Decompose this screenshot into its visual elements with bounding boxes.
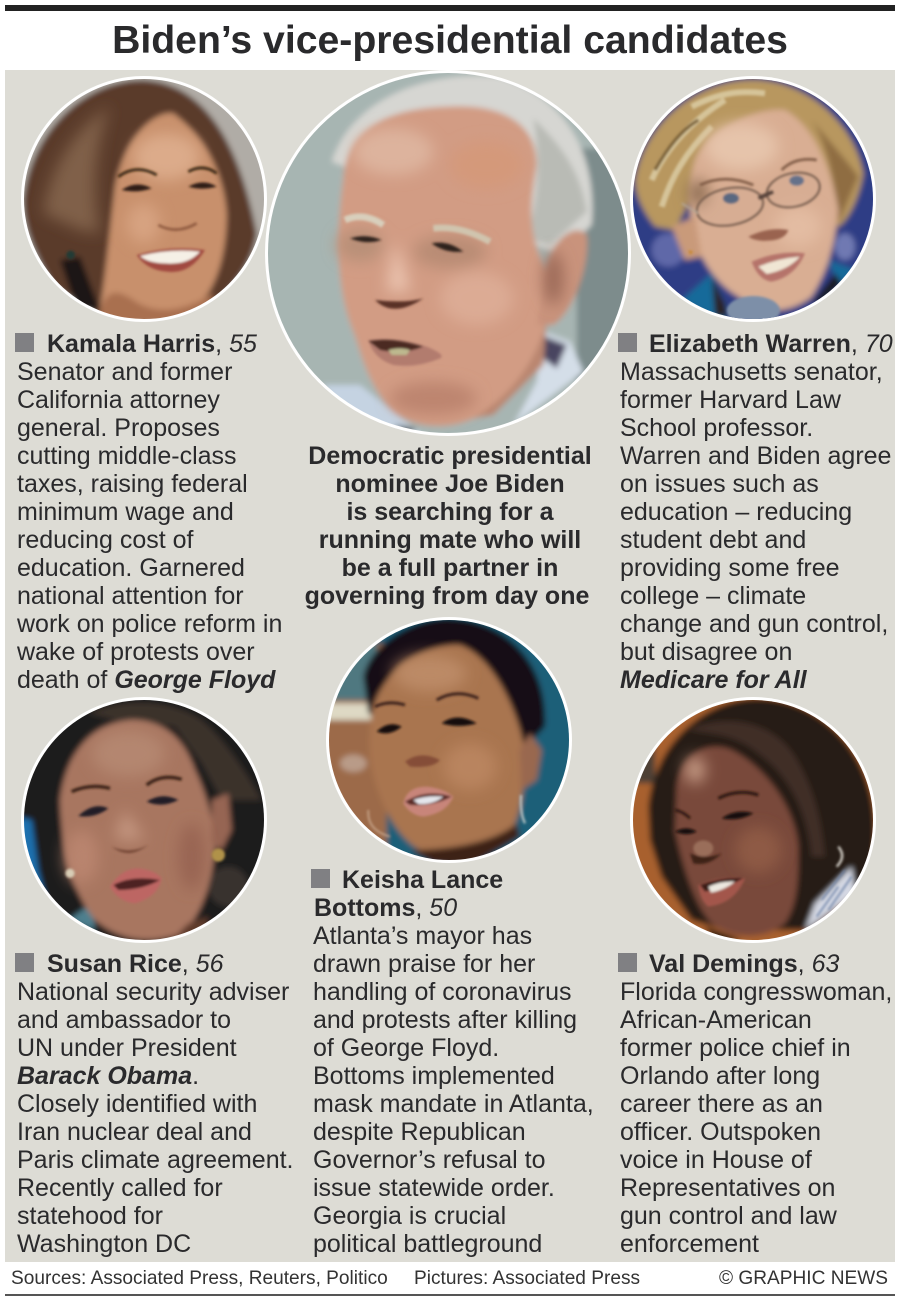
text: Kamala Harris: minimum wage and bbox=[17, 498, 234, 526]
text: Kamala Harris: general. Proposes bbox=[17, 414, 220, 442]
text: Susan Rice: Barack Obama. bbox=[17, 1062, 199, 1090]
text: Keisha Lance Bottoms: and protests after killing bbox=[313, 1006, 577, 1034]
text: Elizabeth Warren: student debt and bbox=[620, 526, 806, 554]
text: Kamala Harris: cutting middle-class bbox=[17, 442, 237, 470]
top rule bbox=[5, 5, 895, 11]
text: Keisha Lance Bottoms: issue statewide order. bbox=[313, 1174, 555, 1202]
text: Keisha Lance Bottoms: Bottoms, 50 bbox=[314, 894, 457, 922]
text: Val Demings bbox=[618, 950, 892, 1258]
footer credits bbox=[11, 1268, 888, 1289]
text: Keisha Lance Bottoms bbox=[311, 866, 594, 1258]
text: Val Demings: African-American bbox=[620, 1006, 812, 1034]
text: Val Demings: officer. Outspoken bbox=[620, 1118, 821, 1146]
text: Susan Rice: Susan Rice, 56 bbox=[47, 950, 224, 978]
text: Val Demings: Representatives on bbox=[620, 1174, 835, 1202]
text: Keisha Lance Bottoms: Bottoms implemented bbox=[313, 1062, 555, 1090]
text: Kamala Harris: death of George Floyd bbox=[17, 666, 276, 694]
text: Elizabeth Warren: Warren and Biden agree bbox=[620, 442, 891, 470]
text: Keisha Lance Bottoms: political battleground bbox=[313, 1230, 542, 1258]
title: Biden’s vice-presidential candidates bbox=[112, 19, 788, 62]
text: Kamala Harris: wake of protests over bbox=[16, 638, 255, 666]
text: Val Demings: Val Demings, 63 bbox=[649, 950, 839, 978]
bottom rule bbox=[5, 1294, 895, 1296]
text: Keisha Lance Bottoms: despite Republican bbox=[313, 1118, 526, 1146]
portrait: Keisha Lance Bottoms bbox=[326, 617, 572, 863]
text: Keisha Lance Bottoms: of George Floyd. bbox=[313, 1034, 499, 1062]
portrait: Elizabeth Warren bbox=[630, 76, 876, 322]
text: Keisha Lance Bottoms: Keisha Lance bbox=[342, 866, 503, 894]
text: Susan Rice: National security adviser bbox=[17, 978, 289, 1006]
text: Biden intro: nominee Joe Biden bbox=[335, 470, 565, 498]
text: Val Demings: former police chief in bbox=[620, 1034, 851, 1062]
text: Elizabeth Warren bbox=[618, 330, 893, 694]
text: Elizabeth Warren: change and gun control, bbox=[620, 610, 888, 638]
text: Val Demings: enforcement bbox=[620, 1230, 759, 1258]
text: Kamala Harris: California attorney bbox=[17, 386, 220, 414]
text: Kamala Harris: education. Garnered bbox=[17, 554, 245, 582]
text: Keisha Lance Bottoms: Atlanta’s mayor has bbox=[313, 922, 532, 950]
footer credits: Sources: Associated Press, Reuters, Politico bbox=[11, 1268, 388, 1289]
text: Susan Rice: statehood for bbox=[17, 1202, 163, 1230]
text: Kamala Harris: taxes, raising federal bbox=[17, 470, 248, 498]
text: Elizabeth Warren: School professor. bbox=[620, 414, 813, 442]
text: Susan Rice: and ambassador to bbox=[17, 1006, 231, 1034]
text: Elizabeth Warren: college – climate bbox=[620, 582, 806, 610]
text: Biden intro: Democratic presidential bbox=[308, 442, 592, 470]
text: Biden intro: governing from day one bbox=[305, 582, 589, 610]
text: Val Demings: career there as an bbox=[620, 1090, 823, 1118]
portrait: Kamala Harris bbox=[21, 76, 267, 322]
text: Kamala Harris: Senator and former bbox=[17, 358, 232, 386]
text: Susan Rice: Washington DC bbox=[17, 1230, 191, 1258]
text: Kamala Harris: Kamala Harris, 55 bbox=[47, 330, 257, 358]
portrait: Susan Rice bbox=[21, 697, 267, 943]
text: Keisha Lance Bottoms: drawn praise for her bbox=[313, 950, 535, 978]
text: Val Demings: Florida congresswoman, bbox=[620, 978, 892, 1006]
text: Elizabeth Warren: education – reducing bbox=[620, 498, 852, 526]
footer credits: © GRAPHIC NEWS bbox=[719, 1268, 888, 1289]
text: Keisha Lance Bottoms: Governor’s refusal to bbox=[313, 1146, 546, 1174]
text: Val Demings: gun control and law bbox=[620, 1202, 838, 1230]
text: Elizabeth Warren: Medicare for All bbox=[620, 666, 808, 694]
text: Susan Rice: Closely identified with bbox=[17, 1090, 257, 1118]
portrait: Val Demings bbox=[630, 697, 876, 943]
text: Susan Rice: Iran nuclear deal and bbox=[17, 1118, 252, 1146]
text: Val Demings: voice in House of bbox=[620, 1146, 812, 1174]
text: Elizabeth Warren: Elizabeth Warren, 70 bbox=[649, 330, 893, 358]
text: Kamala Harris: work on police reform in bbox=[16, 610, 282, 638]
text: Keisha Lance Bottoms: Georgia is crucial bbox=[313, 1202, 506, 1230]
text: Elizabeth Warren: providing some free bbox=[620, 554, 840, 582]
text: Elizabeth Warren: former Harvard Law bbox=[620, 386, 842, 414]
text: Susan Rice: UN under President bbox=[17, 1034, 237, 1062]
text: Val Demings: Orlando after long bbox=[620, 1062, 820, 1090]
text: Kamala Harris bbox=[15, 330, 282, 694]
footer credits: Pictures: Associated Press bbox=[414, 1268, 640, 1289]
text: Susan Rice: Paris climate agreement. bbox=[17, 1146, 294, 1174]
text: Biden intro: running mate who will bbox=[319, 526, 581, 554]
portrait: Joe Biden bbox=[260, 65, 640, 445]
text: Susan Rice: Recently called for bbox=[17, 1174, 223, 1202]
text: Keisha Lance Bottoms: handling of coronavirus bbox=[313, 978, 572, 1006]
text: Susan Rice bbox=[15, 950, 294, 1258]
text: Biden intro: is searching for a bbox=[346, 498, 555, 526]
text: Kamala Harris: national attention for bbox=[17, 582, 244, 610]
text: Biden intro: be a full partner in bbox=[342, 554, 558, 582]
text: Kamala Harris: reducing cost of bbox=[17, 526, 194, 554]
text: Elizabeth Warren: on issues such as bbox=[620, 470, 819, 498]
text: Keisha Lance Bottoms: mask mandate in Atlanta, bbox=[313, 1090, 594, 1118]
text: Elizabeth Warren: but disagree on bbox=[620, 638, 792, 666]
text: Biden intro bbox=[305, 442, 592, 610]
text: Elizabeth Warren: Massachusetts senator, bbox=[620, 358, 883, 386]
